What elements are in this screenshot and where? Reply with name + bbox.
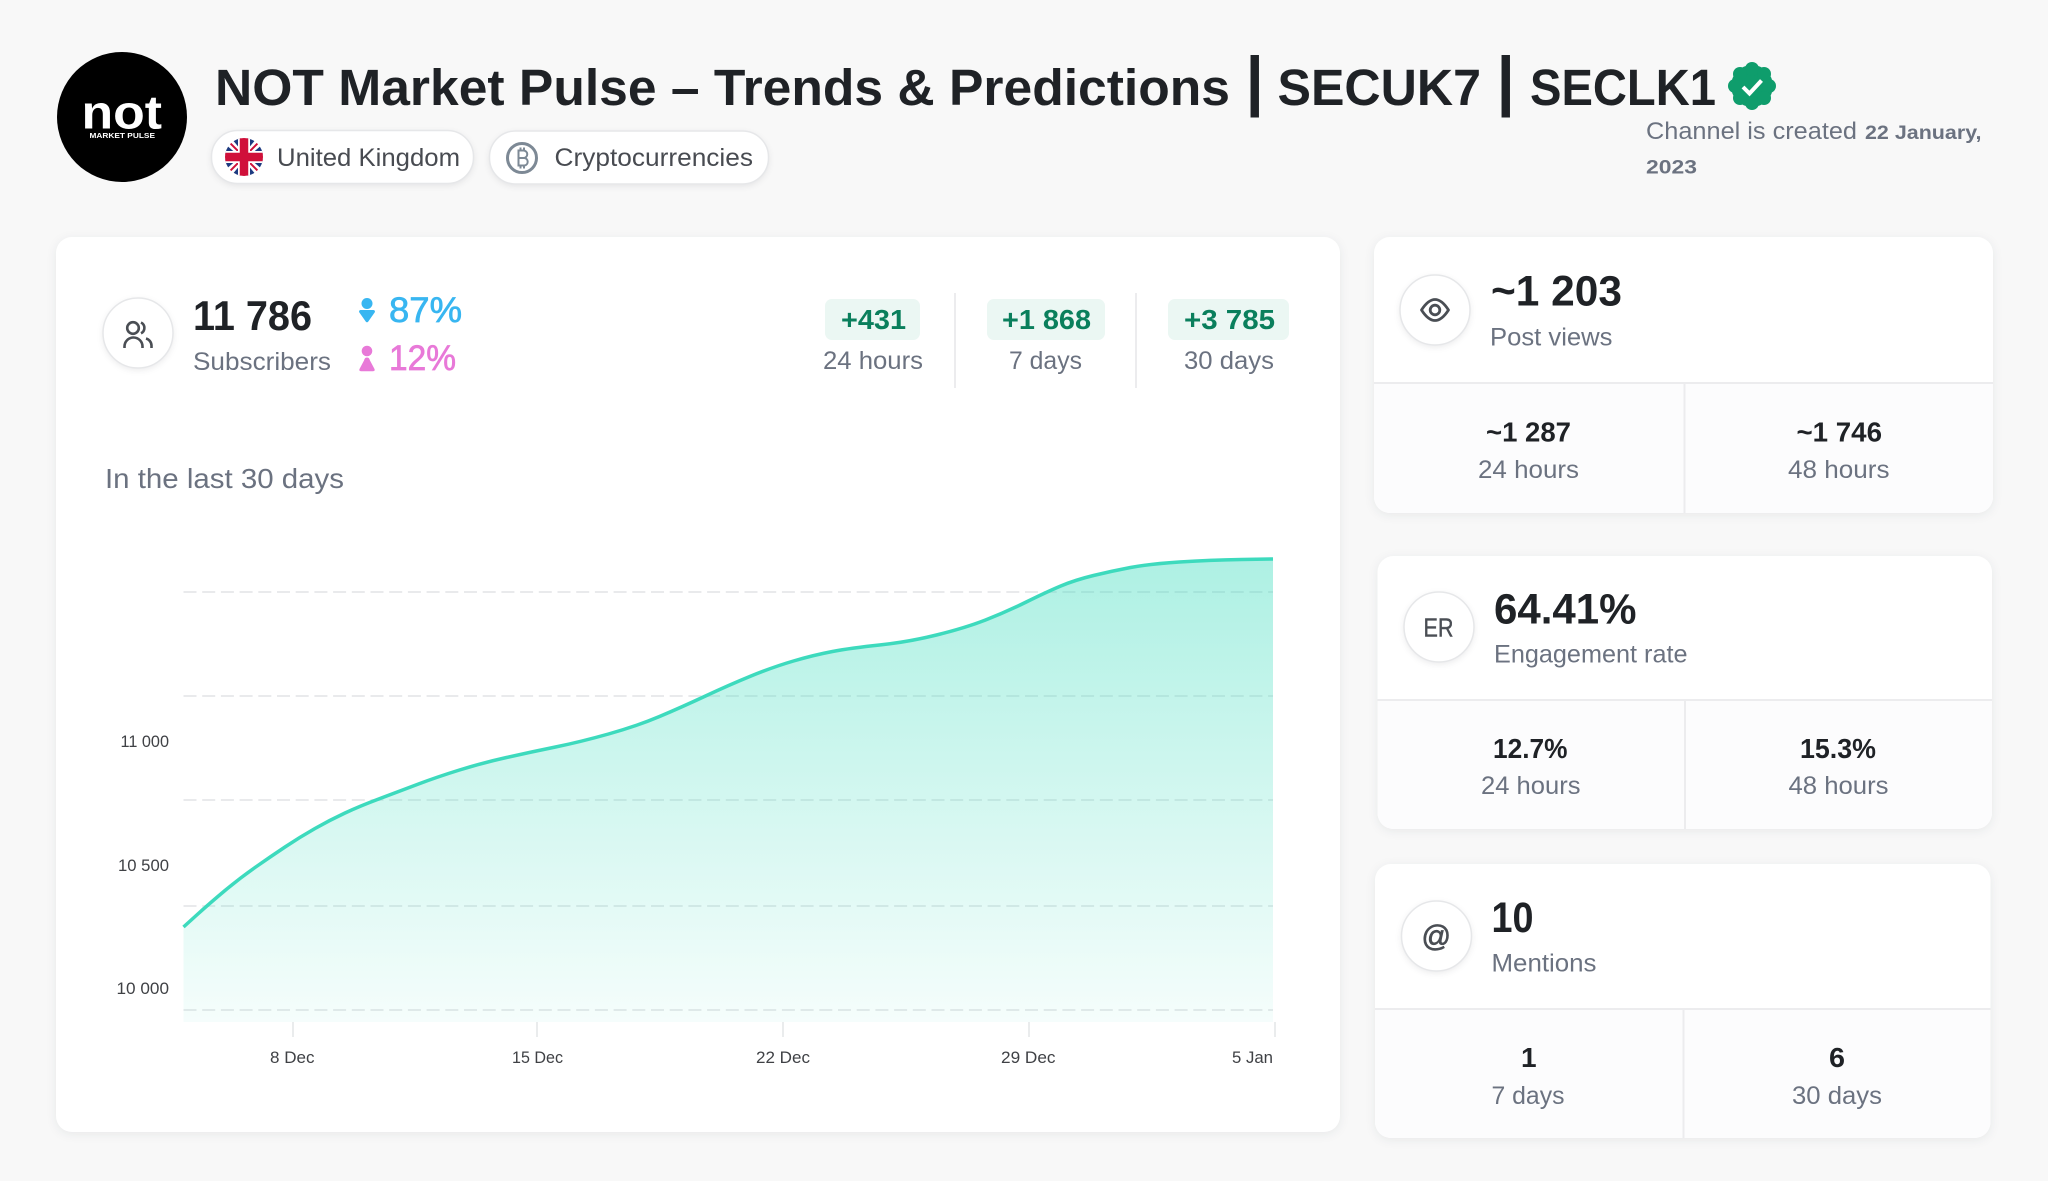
area chart: subscribers over 30 days: 8 Dec	[270, 1048, 315, 1067]
engagement 24 hours: 24 hours	[1481, 772, 1580, 800]
post views value	[1490, 268, 1622, 352]
female share: 12%	[389, 339, 456, 378]
area chart: subscribers over 30 days: 29 Dec	[1001, 1048, 1056, 1067]
area chart: subscribers over 30 days: 11 000	[120, 732, 169, 751]
panel: mentions	[1375, 864, 1990, 1138]
mentions 30 days: 30 days	[1792, 1082, 1882, 1110]
channel logo	[57, 52, 187, 182]
area chart: subscribers over 30 days	[116, 559, 1275, 1067]
title: SECUK7	[1278, 59, 1481, 116]
post views 24 hours	[1478, 416, 1579, 484]
growth: 24 hours: +431	[841, 304, 906, 335]
area chart: subscribers over 30 days: 10 000	[116, 979, 169, 998]
male share: 87%	[389, 291, 462, 330]
icon: verified badge	[1728, 62, 1776, 110]
engagement 24 hours: 12.7%	[1493, 733, 1568, 764]
chart heading: In the last 30 days	[105, 463, 344, 494]
panel: post views	[1374, 237, 1993, 513]
panel: subscribers	[56, 237, 1340, 1132]
growth: 24 hours: 24 hours	[823, 347, 923, 375]
subscriber count: 11 786	[193, 292, 312, 339]
area chart: subscribers over 30 days: 5 Jan	[1232, 1048, 1273, 1067]
mentions 7 days	[1492, 1042, 1564, 1110]
channel creation date: 22 January,	[1865, 123, 1982, 144]
subscriber count: Subscribers	[193, 348, 331, 376]
icon: ER	[1404, 592, 1474, 662]
channel logo: not	[82, 86, 162, 138]
engagement 48 hours: 15.3%	[1800, 733, 1876, 764]
mentions value	[1492, 894, 1596, 978]
growth: 7 days	[987, 299, 1105, 375]
channel creation date: 2023	[1646, 158, 1697, 178]
pill: United Kingdom: United Kingdom	[277, 144, 460, 172]
mentions value: Mentions	[1492, 950, 1596, 978]
icon: at sign	[1402, 901, 1472, 971]
pill: Cryptocurrencies	[490, 131, 768, 184]
mentions 30 days: 6	[1829, 1042, 1845, 1073]
post views value: Post views	[1490, 324, 1612, 352]
title: |	[1246, 43, 1264, 119]
title	[215, 43, 1716, 119]
channel creation date	[1646, 118, 1982, 178]
mentions 30 days	[1792, 1042, 1882, 1110]
mentions value: 10	[1492, 894, 1534, 942]
icon: ER: ER	[1424, 612, 1454, 642]
icon: at sign: @	[1422, 920, 1451, 953]
post views 24 hours: 24 hours	[1478, 456, 1579, 484]
engagement 48 hours: 48 hours	[1788, 772, 1888, 800]
subscriber count	[193, 292, 331, 376]
growth: 7 days: +1 868	[1002, 304, 1091, 335]
mentions 7 days: 7 days	[1492, 1082, 1564, 1110]
engagement rate value: 64.41%	[1494, 586, 1636, 634]
post views value: ~1 203	[1491, 268, 1622, 316]
growth: 30 days: +3 785	[1184, 304, 1275, 335]
engagement rate value: Engagement rate	[1494, 640, 1688, 668]
post views 48 hours: 48 hours	[1788, 456, 1890, 484]
area chart: subscribers over 30 days: 10 500	[118, 856, 169, 875]
growth: 30 days	[1168, 299, 1289, 375]
growth: 24 hours	[823, 299, 923, 375]
female share	[359, 339, 456, 378]
channel logo: MARKET PULSE	[90, 133, 155, 140]
mentions 7 days: 1	[1521, 1042, 1537, 1073]
post views 24 hours: ~1 287	[1486, 416, 1571, 448]
engagement 48 hours	[1788, 733, 1888, 800]
post views 48 hours: ~1 746	[1796, 416, 1882, 448]
icon: UK flag	[225, 138, 263, 176]
icon: users	[103, 298, 173, 368]
pill: Cryptocurrencies: Cryptocurrencies	[554, 144, 753, 172]
growth: 7 days: 7 days	[1009, 347, 1082, 375]
title: NOT Market Pulse – Trends & Predictions	[215, 59, 1230, 116]
pill: United Kingdom	[212, 130, 474, 184]
title: |	[1496, 43, 1515, 119]
growth: 30 days: 30 days	[1184, 347, 1274, 375]
icon: eye	[1400, 275, 1470, 345]
male share	[359, 291, 462, 330]
area chart: subscribers over 30 days: 22 Dec	[756, 1048, 810, 1067]
icon: bitcoin	[508, 144, 536, 172]
channel creation date: Channel is created	[1646, 118, 1857, 145]
area chart: subscribers over 30 days: 15 Dec	[512, 1048, 563, 1067]
engagement 24 hours	[1481, 733, 1580, 800]
panel: engagement rate	[1378, 556, 1992, 829]
post views 48 hours	[1788, 416, 1890, 484]
title: SECLK1	[1530, 59, 1716, 116]
engagement rate value	[1494, 586, 1688, 668]
